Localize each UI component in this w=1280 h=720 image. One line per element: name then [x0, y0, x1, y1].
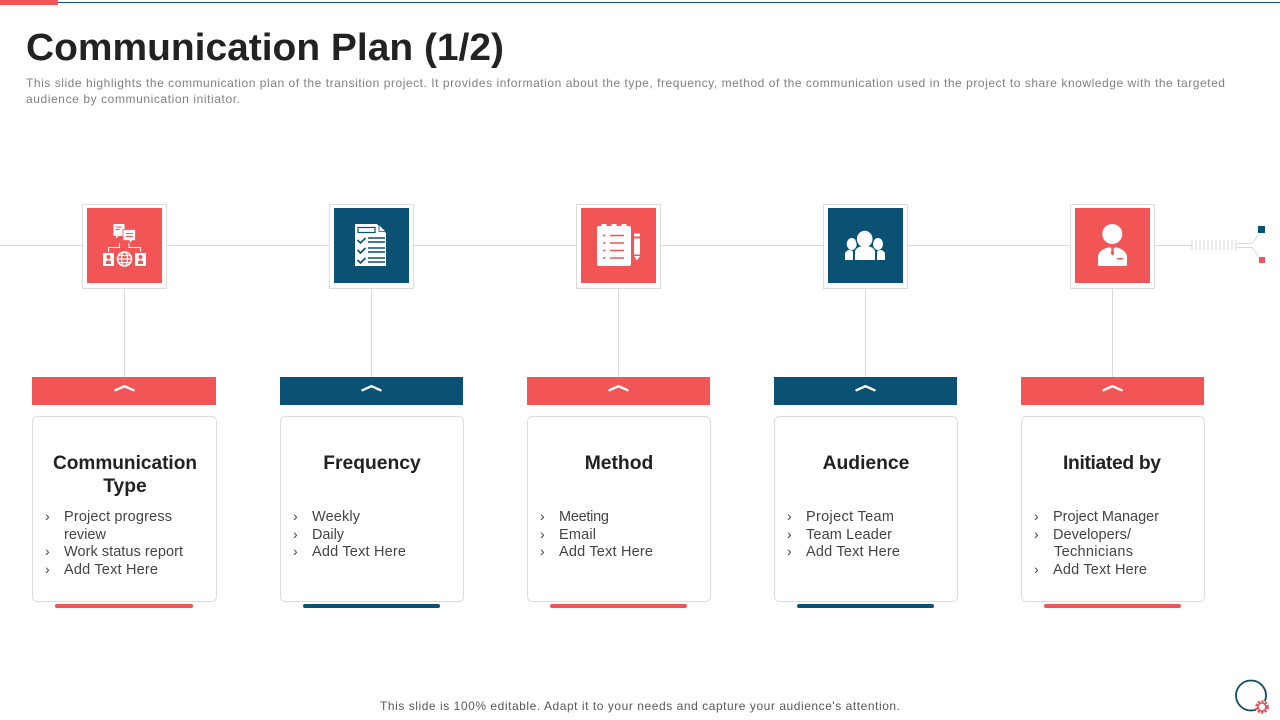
underline bar [1044, 604, 1181, 608]
card [528, 416, 710, 602]
icon frame: frequency [330, 204, 414, 288]
subtitle: audience by communication initiator. [26, 92, 240, 106]
heading: Initiated by [1063, 453, 1161, 474]
bullet list: Developers/ [1053, 527, 1132, 543]
bullet list: › [1034, 526, 1039, 542]
bullet list: Technicians [1054, 544, 1133, 560]
bullet list: Meeting [559, 509, 609, 525]
timeline connector [0, 226, 1265, 263]
heading: Frequency [323, 453, 421, 474]
icon: circle and gear [1236, 680, 1268, 714]
end marker: blue square [1258, 226, 1265, 233]
bullet list: Add Text Here [1053, 562, 1147, 578]
bullet list: › [45, 543, 50, 559]
header band [32, 377, 216, 405]
card [280, 416, 464, 602]
icon frame: method [576, 204, 660, 288]
bullet list: › [787, 526, 792, 542]
column: frequency [280, 204, 464, 608]
bullet list [293, 508, 406, 560]
header band [1021, 377, 1204, 405]
bullet list: › [293, 543, 298, 559]
heading: Method [585, 453, 653, 474]
bullet list [540, 508, 653, 560]
bullet list: › [540, 526, 545, 542]
bullet list: › [45, 508, 50, 524]
column: audience [774, 204, 958, 608]
icon: business person [1098, 224, 1127, 266]
heading: Communication [53, 453, 197, 474]
card [774, 416, 958, 602]
icon: group of people [845, 230, 885, 260]
bullet list [45, 508, 183, 578]
subtitle: This slide highlights the communication plan of the transition project. It provides information about the type, frequency, method of the communication used in the project to share knowledge with the targeted [26, 76, 1225, 90]
column: method [527, 204, 710, 608]
icon: notepad and pencil [597, 224, 640, 266]
bullet list: Team Leader [806, 527, 892, 543]
bullet list: › [1034, 508, 1039, 524]
icon frame: audience [824, 204, 908, 288]
underline bar [550, 604, 687, 608]
heading: Audience [823, 453, 910, 474]
bullet list: Add Text Here [559, 544, 653, 560]
icon: chat and network [103, 224, 146, 266]
bullet list: Add Text Here [312, 544, 406, 560]
bullet list: › [787, 543, 792, 559]
bullet list: › [787, 508, 792, 524]
end marker: red square [1259, 257, 1265, 263]
bullet list [787, 508, 900, 560]
icon frame: initiated by [1070, 204, 1154, 288]
card [32, 416, 216, 602]
title: Communication Plan (1/2) [26, 27, 504, 69]
top accent bar [0, 0, 1280, 5]
bullet list: Daily [312, 527, 345, 543]
bullet list: › [540, 543, 545, 559]
footer note: This slide is 100% editable. Adapt it to your needs and capture your audience's attention. [380, 699, 900, 713]
header band [280, 377, 463, 405]
bullet list: Email [559, 527, 596, 543]
bullet list: Add Text Here [64, 562, 158, 578]
bullet list: Work status report [64, 544, 183, 560]
icon frame: communication type [82, 204, 166, 288]
bullet list: › [293, 526, 298, 542]
subtitle [26, 76, 1225, 106]
bullet list: Weekly [312, 509, 361, 525]
header band [527, 377, 710, 405]
card [1022, 416, 1204, 602]
column: communication type [32, 204, 216, 608]
bullet list [1034, 508, 1159, 578]
icon: checklist document [355, 224, 386, 266]
bullet list: › [293, 508, 298, 524]
bullet list: Add Text Here [806, 544, 900, 560]
bullet list: › [45, 561, 50, 577]
underline bar [55, 604, 193, 608]
heading: Type [103, 476, 147, 497]
bullet list: Project Team [806, 509, 894, 525]
heading [53, 453, 197, 497]
bullet list: › [540, 508, 545, 524]
header band [774, 377, 957, 405]
bullet list: › [1034, 561, 1039, 577]
column: initiated by [1021, 204, 1204, 608]
underline bar [303, 604, 440, 608]
bullet list: review [64, 527, 107, 543]
bullet list: Project progress [64, 509, 172, 525]
underline bar [797, 604, 934, 608]
bullet list: Project Manager [1053, 509, 1159, 525]
